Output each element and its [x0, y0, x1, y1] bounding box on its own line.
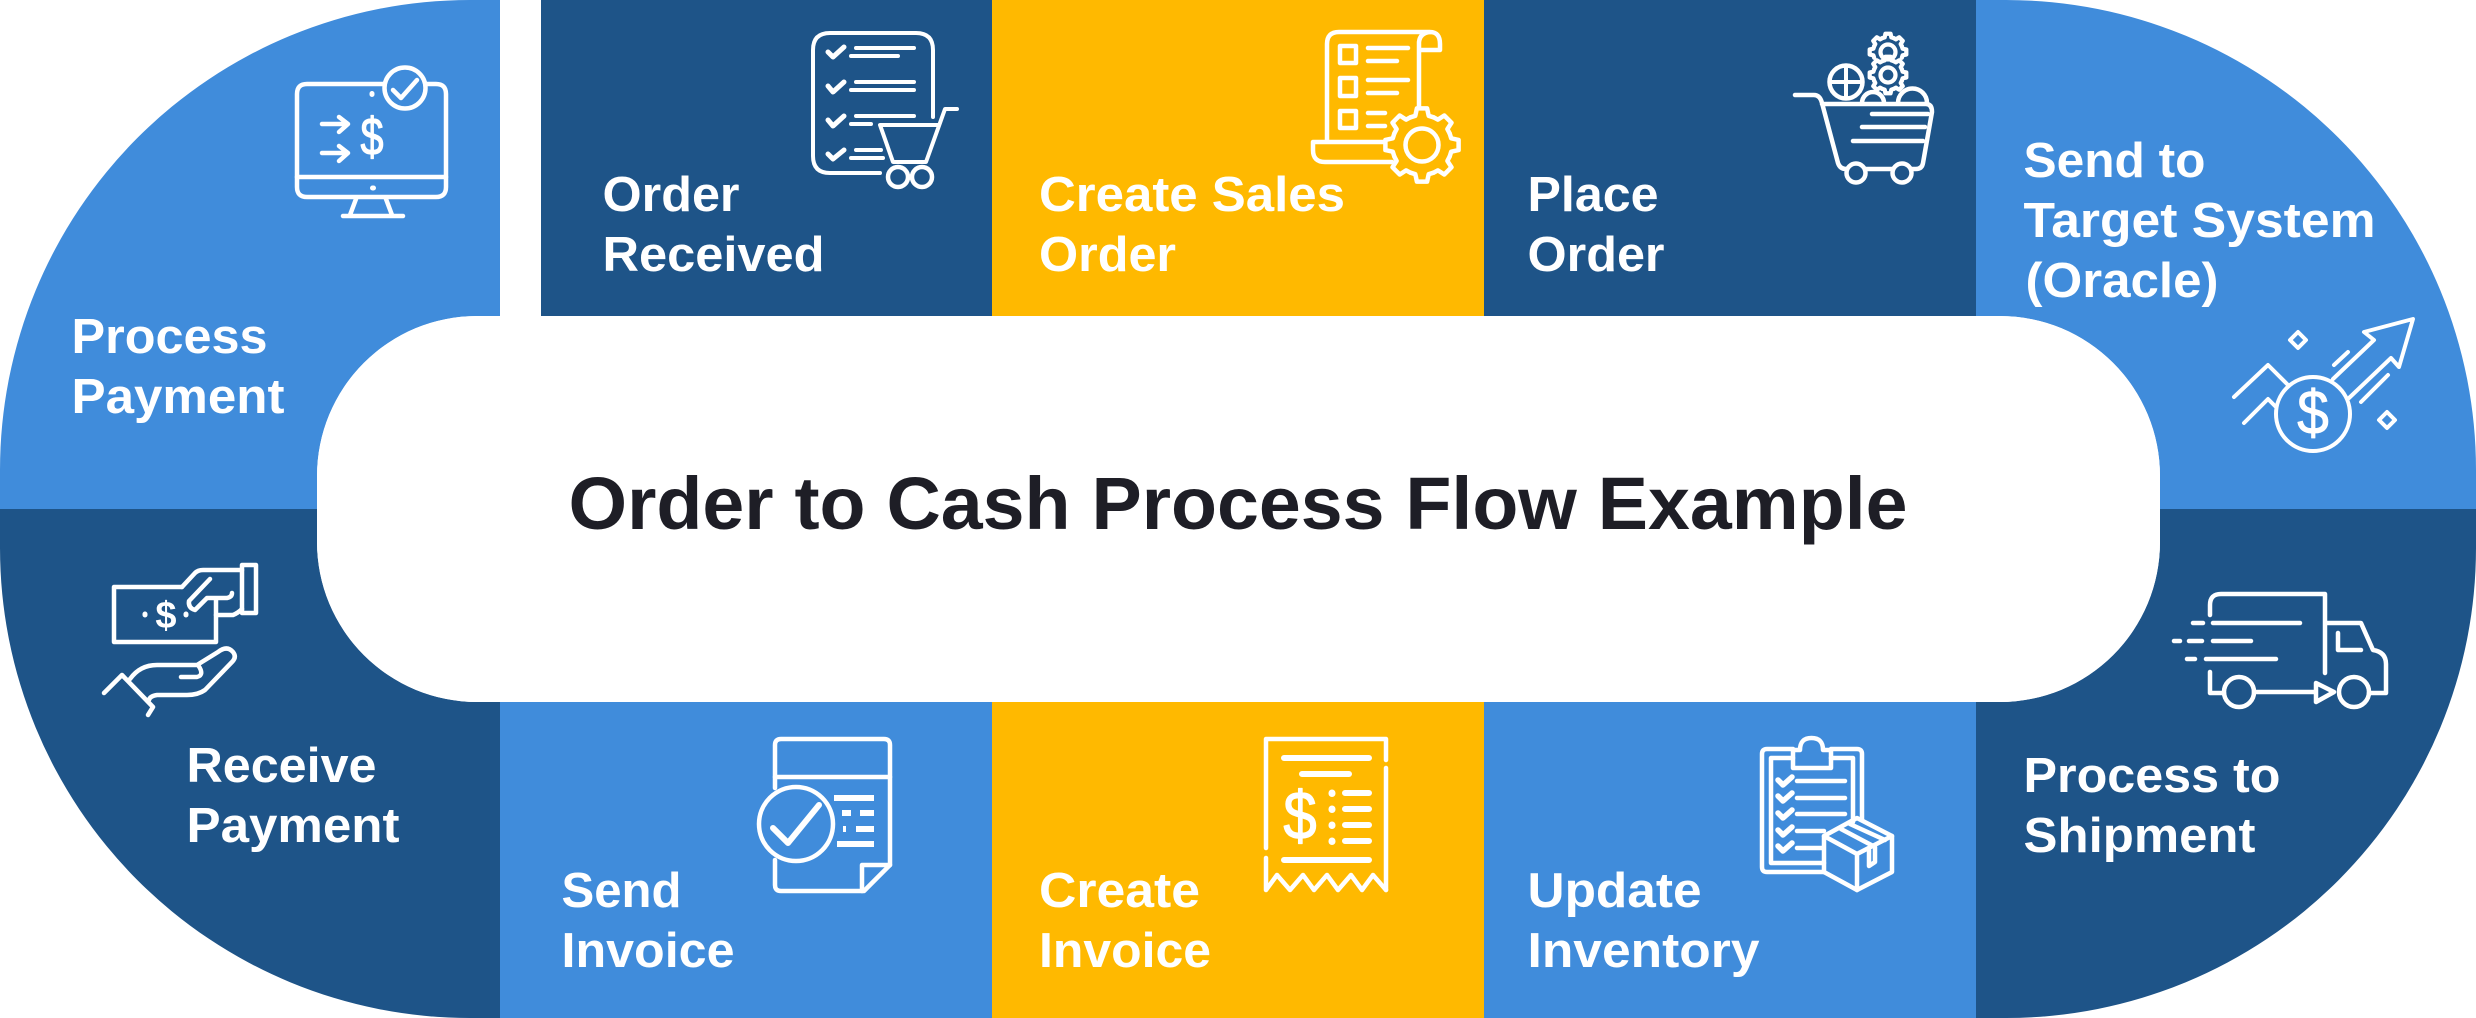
label: receive payment: Receive — [186, 739, 376, 793]
label: send to target system (oracle): (Oracle) — [2026, 254, 2218, 308]
segment shape: create sales order — [992, 0, 1484, 316]
label: place order: Place — [1528, 168, 1658, 222]
icon: hands exchanging cash — [104, 565, 256, 715]
label: order received: Order — [602, 168, 740, 222]
segment shape: place order — [1484, 0, 1976, 316]
segment shape: process to shipment — [1976, 509, 2476, 1018]
label: send to target system (oracle) — [2024, 134, 2376, 308]
icon: growth arrow with dollar coin — [2234, 319, 2413, 451]
panel: place order — [1484, 0, 1976, 316]
label: create sales order: Create Sales — [1039, 168, 1345, 222]
panel: order received — [541, 0, 992, 316]
label: send to target system (oracle): Target System — [2024, 194, 2376, 248]
icon: scroll document with gear — [1313, 32, 1459, 182]
icon: invoice with check mark — [759, 739, 890, 891]
icon: receipt with dollar — [1266, 739, 1386, 890]
icon: clipboard with box — [1762, 738, 1892, 890]
icon: receipt with dollar: $ — [1283, 777, 1317, 854]
icon: monitor with dollar and check: $ — [361, 108, 383, 167]
icon: delivery truck — [2174, 594, 2386, 707]
panel: update inventory — [1484, 702, 1976, 1018]
segment shape: process payment — [0, 0, 500, 509]
label: create sales order — [1039, 168, 1345, 282]
label: process payment — [72, 310, 284, 424]
center panel — [317, 316, 2160, 702]
segment shape: update inventory — [1484, 702, 1976, 1018]
label: process to shipment: Shipment — [2024, 809, 2256, 863]
segment shape: create invoice — [992, 702, 1484, 1018]
label: receive payment — [186, 739, 400, 853]
icon: cart with gears — [1795, 34, 1932, 183]
title: Order to Cash Process Flow Example — [568, 462, 1907, 545]
label: place order: Order — [1528, 228, 1664, 282]
label: send invoice: Invoice — [562, 924, 734, 978]
label: process to shipment — [2024, 749, 2280, 863]
label: process payment: Process — [72, 310, 268, 364]
label: receive payment: Payment — [186, 799, 400, 853]
label: process payment: Payment — [72, 370, 284, 424]
label: create invoice — [1039, 864, 1211, 978]
label: place order — [1528, 168, 1664, 282]
panel: receive payment — [0, 509, 500, 1018]
label: process to shipment: Process to — [2024, 749, 2280, 803]
label: send invoice: Send — [562, 864, 682, 918]
panel: send to target system — [1976, 0, 2476, 509]
panel: create sales order — [992, 0, 1484, 316]
segment shape: receive payment — [0, 509, 500, 1018]
icon: hands exchanging cash: $ — [155, 595, 177, 637]
label: create invoice: Invoice — [1039, 924, 1211, 978]
label: update inventory: Update — [1528, 864, 1702, 918]
label: order received — [602, 168, 824, 282]
icon: monitor with dollar and check — [297, 68, 446, 216]
label: create sales order: Order — [1039, 228, 1176, 282]
label: create invoice: Create — [1039, 864, 1200, 918]
panel: process payment — [0, 0, 500, 509]
panel: create invoice — [992, 702, 1484, 1018]
segment shape: send invoice — [500, 702, 992, 1018]
segment shape: order received — [541, 0, 992, 316]
label: order received: Received — [602, 228, 824, 282]
label: send to target system (oracle): Send to — [2024, 134, 2206, 188]
label: update inventory: Inventory — [1528, 924, 1760, 978]
panel: process to shipment — [1976, 509, 2476, 1018]
segment shape: send to target system — [1976, 0, 2476, 509]
label: update inventory — [1528, 864, 1760, 978]
label: send invoice — [562, 864, 734, 978]
icon: growth arrow with dollar coin: $ — [2297, 378, 2329, 448]
panel: send invoice — [500, 702, 992, 1018]
icon: checklist and cart — [813, 33, 957, 187]
